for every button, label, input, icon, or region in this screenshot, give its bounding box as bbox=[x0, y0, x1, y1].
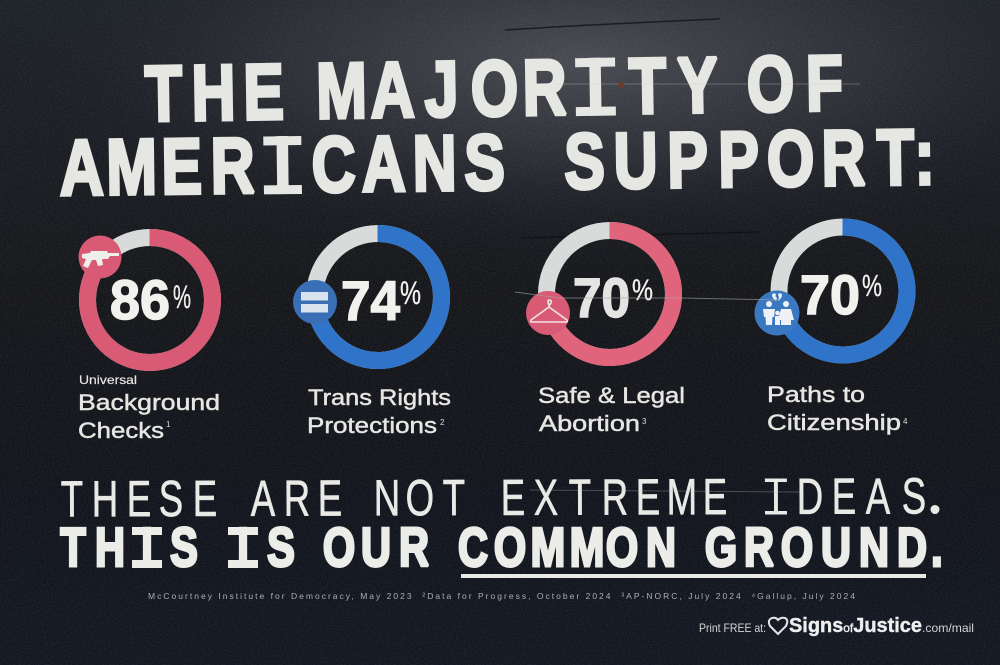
donut chart: 70 percent red bbox=[546, 230, 674, 358]
label: universal background checks: Checks bbox=[78, 418, 164, 443]
label: universal background checks: Background bbox=[78, 390, 220, 415]
label: universal background checks: 1 bbox=[166, 420, 171, 429]
donut chart: 74 percent bbox=[314, 234, 442, 360]
panel: safe and legal abortion 70% bbox=[526, 230, 685, 436]
icon: coat hanger bbox=[526, 291, 570, 335]
icon: rifle bbox=[78, 236, 122, 278]
value 74%: 74 bbox=[341, 269, 400, 332]
value 70%: % bbox=[632, 274, 653, 307]
label: safe and legal abortion: 3 bbox=[642, 417, 647, 426]
label: paths to citizenship: 4 bbox=[903, 417, 908, 426]
icon: equals sign bbox=[293, 280, 337, 324]
title: AMERICANS SUPPORT: bbox=[59, 112, 935, 212]
label: safe and legal abortion: Abortion bbox=[539, 411, 640, 436]
value 86%: 86 bbox=[110, 268, 170, 331]
value 70%: 70 bbox=[800, 263, 860, 326]
title: THE MAJORITY OF bbox=[144, 38, 844, 138]
label: trans rights protections: Protections bbox=[307, 413, 437, 438]
label: universal background checks: Universal bbox=[79, 373, 137, 387]
credit: signs of justice: .com/mail bbox=[922, 621, 974, 635]
panel: paths to citizenship 70% bbox=[754, 227, 908, 435]
credit: signs of justice: Print FREE at: bbox=[699, 621, 766, 635]
label: paths to citizenship: Citizenship bbox=[767, 410, 901, 435]
label: safe and legal abortion: Safe & Legal bbox=[538, 383, 685, 408]
label: universal background checks bbox=[78, 373, 220, 443]
panel: trans rights 74% bbox=[293, 234, 451, 438]
label: paths to citizenship: Paths to bbox=[767, 382, 865, 407]
value 70%: % bbox=[862, 268, 882, 303]
label: trans rights protections: 2 bbox=[440, 418, 445, 427]
value 70%: 70 bbox=[573, 266, 630, 329]
title bbox=[59, 38, 935, 212]
credit: signs of justice bbox=[699, 615, 974, 637]
sources footnote: McCourtney Institute for Democracy, May 2023 ²Data for Progress, October 2024 ³AP-NORC, July 2024 ⁴Gallup, July 2024 bbox=[148, 591, 855, 601]
icon: family with broken heart bbox=[754, 290, 800, 336]
panel: background checks 86% bbox=[78, 236, 220, 443]
label: trans rights protections: Trans Rights bbox=[308, 385, 451, 410]
donut chart: 86 percent bbox=[88, 238, 212, 362]
donut chart: 70 percent blue bbox=[779, 227, 907, 355]
value 86%: % bbox=[173, 279, 191, 315]
label: trans rights protections bbox=[307, 385, 451, 438]
label: safe and legal abortion bbox=[538, 383, 685, 436]
statement: common ground: THIS IS OUR COMMON GROUND. bbox=[60, 517, 943, 578]
label: paths to citizenship bbox=[767, 382, 908, 435]
statement: not extreme ideas: THESE ARE NOT EXTREME IDEAS. bbox=[61, 469, 940, 528]
value 74%: % bbox=[400, 275, 421, 311]
credit: signs of justice: SignsofJustice bbox=[789, 615, 922, 637]
